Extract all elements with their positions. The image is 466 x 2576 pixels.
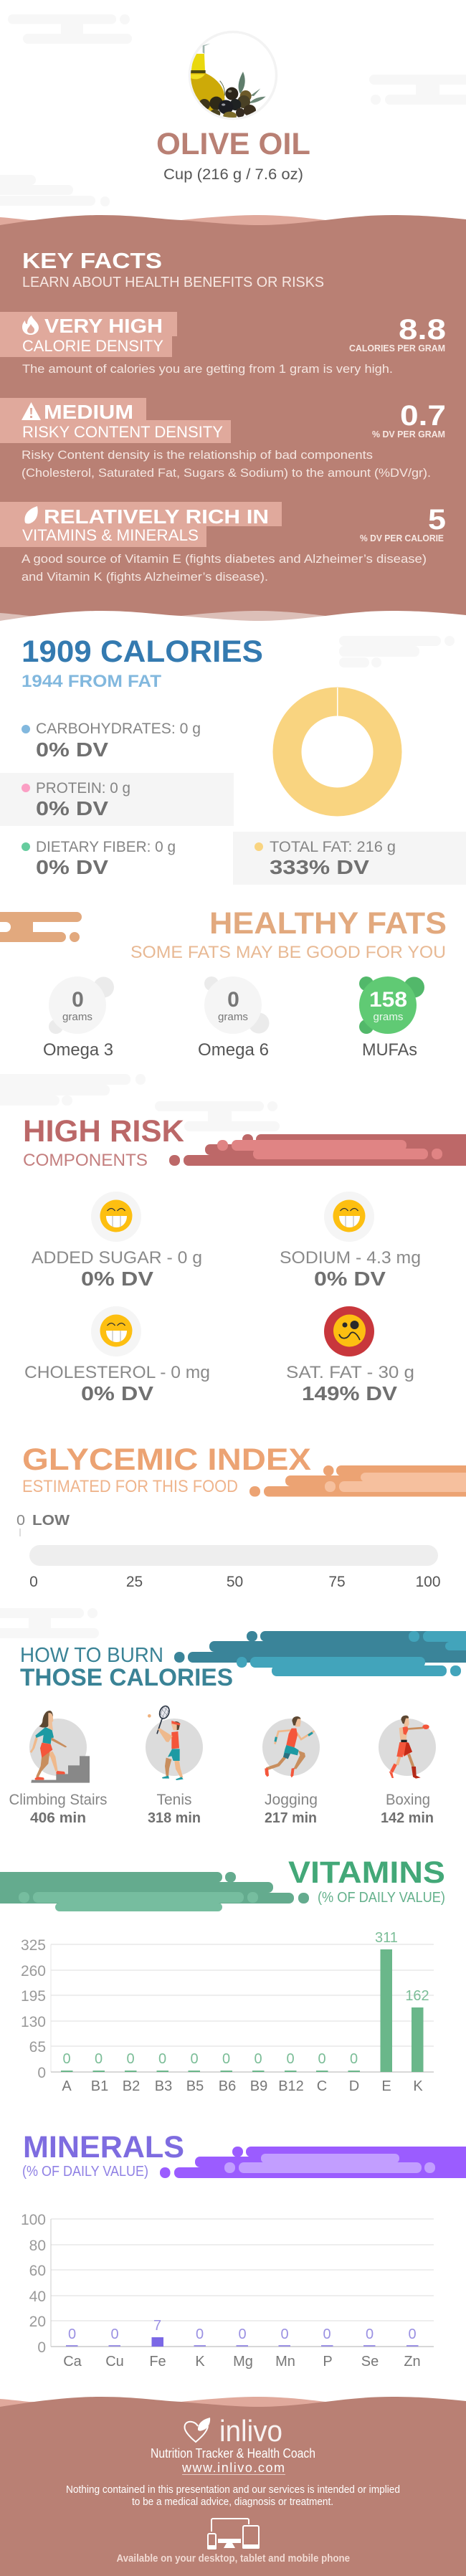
heading: minerals: MINERALS — [23, 2130, 184, 2164]
fact: calorie density: CALORIE DENSITY — [22, 337, 163, 355]
background cloud: mid centre — [155, 1101, 280, 1131]
bar chart: vitamins: C — [317, 2078, 327, 2094]
bar chart: vitamins: 130 — [21, 2014, 46, 2030]
gauge scale — [29, 1574, 441, 1590]
badge: omega 3 — [43, 976, 114, 1060]
bar chart: vitamins: B6 — [219, 2078, 236, 2094]
bar chart: minerals: Se — [361, 2354, 379, 2370]
background cloud: top right — [369, 75, 466, 105]
fact: vitamins and minerals: % DV PER CALORIE — [360, 533, 444, 543]
fact: calorie density: VERY HIGH — [44, 315, 163, 337]
icon: grinning face — [324, 1192, 374, 1242]
metric: dv per gram: 0.7 — [400, 400, 446, 432]
bar chart: vitamins: 0 — [254, 2051, 262, 2067]
bar chart: minerals: 80 — [29, 2238, 46, 2254]
background cloud: calories — [339, 636, 455, 667]
activity: boxing: Boxing — [386, 1792, 430, 1808]
activity: climbing stairs — [9, 1711, 108, 1826]
fact: vitamins and minerals: and Vitamin K (fights Alzheimer’s disease). — [22, 570, 268, 584]
legend: protein — [0, 773, 234, 826]
fact: calorie density: CALORIES PER GRAM — [349, 343, 445, 353]
badge: mufas — [359, 976, 424, 1060]
bar chart: minerals: 0 — [323, 2327, 331, 2342]
fact: vitamins and minerals — [0, 502, 446, 584]
legend: dietary fiber — [22, 839, 176, 878]
metric: dv per calorie: 5 — [428, 504, 446, 536]
item: sodium — [280, 1192, 421, 1290]
badge: mufas: 158 — [369, 988, 407, 1012]
activity: climbing stairs: Climbing Stairs — [9, 1792, 108, 1808]
bar chart: minerals: 0 — [68, 2327, 76, 2342]
disclaimer: Nothing contained in this presentation and our services is intended or implied — [66, 2484, 400, 2496]
legend: protein: 0% DV — [36, 797, 108, 819]
bar chart: vitamins: 0 — [286, 2051, 295, 2067]
illustration: jogger — [262, 1716, 320, 1777]
panel: vitamins — [0, 1855, 445, 2094]
badge: mufas: MUFAs — [362, 1040, 417, 1060]
decorative band: high risk — [169, 1134, 466, 1166]
decorative band: burn — [174, 1631, 466, 1676]
decorative band: healthy fats — [0, 912, 82, 942]
bar chart: minerals: Mg — [233, 2354, 253, 2370]
bar chart: vitamins: A — [62, 2078, 72, 2094]
gauge scale: 0 — [29, 1574, 38, 1590]
subheading: components: COMPONENTS — [23, 1151, 148, 1170]
gauge scale: 50 — [227, 1574, 243, 1590]
background cloud: left — [0, 175, 110, 206]
illustration: tennis player — [146, 1705, 203, 1780]
icon: heart with leaf — [184, 2418, 210, 2442]
panel: key facts — [0, 215, 466, 635]
legend: carbohydrates: CARBOHYDRATES: 0 g — [36, 721, 201, 737]
bar chart: vitamins: 0 — [62, 2051, 71, 2067]
gauge value — [16, 1513, 70, 1536]
fact: risky content density: MEDIUM — [44, 401, 133, 423]
website: www.inlivo.com — [181, 2461, 285, 2475]
activity: boxing — [379, 1716, 436, 1826]
bar chart: minerals: 100 — [21, 2212, 46, 2228]
logo: inlivo — [184, 2414, 282, 2448]
fact: vitamins and minerals: RELATIVELY RICH IN — [44, 505, 269, 528]
bar chart: minerals: 7 — [153, 2318, 161, 2334]
bar chart: vitamins: 0 — [318, 2051, 326, 2067]
bar chart: minerals: 0 — [280, 2327, 289, 2342]
badge: mufas: grams — [373, 1011, 403, 1023]
badge: omega 6: 0 — [227, 988, 239, 1012]
fact: calorie density: The amount of calories you are getting from 1 gram is very high. — [22, 362, 393, 376]
bar chart: minerals: Cu — [105, 2354, 124, 2370]
icon: warning triangle — [22, 402, 41, 420]
fact: risky content density: (Cholesterol, Saturated Fat, Sugars & Sodium) to the amount (%DV/gr). — [22, 466, 431, 480]
availability note: Available on your desktop, tablet and mobile phone — [116, 2552, 350, 2565]
panel: burn calories — [9, 1631, 466, 1826]
background cloud: top left — [8, 14, 132, 44]
logo: inlivo: inlivo — [219, 2414, 282, 2448]
bar chart: vitamins: 0 — [158, 2051, 166, 2067]
subheading: healthy fats: SOME FATS MAY BE GOOD FOR YOU — [130, 943, 446, 962]
bar chart: vitamins: B5 — [186, 2078, 204, 2094]
activity: boxing: 142 min — [381, 1810, 434, 1826]
fact: risky content density — [0, 398, 446, 480]
fact: calorie density — [0, 312, 446, 376]
donut chart: macronutrients — [287, 688, 387, 802]
item: saturated fat: SAT. FAT - 30 g — [286, 1363, 414, 1382]
panel: minerals — [21, 2130, 466, 2370]
activity: tennis — [146, 1705, 203, 1826]
bar chart: vitamins: K — [413, 2078, 423, 2094]
icon: desktop, tablet and phone — [207, 2519, 260, 2549]
bar chart: vitamins: B9 — [250, 2078, 267, 2094]
bar chart: vitamins: 195 — [21, 1988, 46, 2005]
disclaimer: to be a medical advice, diagnosis or treatment. — [132, 2496, 333, 2508]
fact: risky content density: % DV PER GRAM — [372, 429, 445, 439]
gauge value: 0 — [16, 1513, 25, 1529]
subheading: vitamins: (% OF DAILY VALUE) — [318, 1890, 445, 1906]
legend: carbohydrates: 0% DV — [36, 738, 108, 761]
icon: leaf — [24, 506, 38, 523]
bar chart: minerals: Fe — [149, 2354, 166, 2370]
legend: protein: PROTEIN: 0 g — [36, 780, 130, 797]
bar chart: minerals: 60 — [29, 2263, 46, 2279]
badge: omega 3: grams — [62, 1011, 92, 1023]
icon: flame — [22, 315, 39, 335]
bar chart: vitamins: 162 — [405, 1988, 429, 2004]
serving size: Cup (216 g / 7.6 oz) — [163, 166, 303, 183]
heading: those calories: THOSE CALORIES — [20, 1664, 233, 1691]
item: saturated fat: 149% DV — [302, 1382, 397, 1405]
gauge scale: 75 — [328, 1574, 346, 1590]
subheading: minerals: (% OF DAILY VALUE) — [22, 2164, 148, 2180]
bar chart: vitamins: B3 — [155, 2078, 172, 2094]
badge: omega 6: grams — [218, 1011, 248, 1023]
bar chart: minerals: 0 — [110, 2327, 119, 2342]
gauge scale: 25 — [126, 1574, 143, 1590]
panel: healthy fats — [0, 906, 447, 1060]
bar chart: vitamins — [21, 1930, 434, 2094]
metric: calories per gram: 8.8 — [399, 314, 446, 346]
food image: olive oil bottle and olives — [186, 32, 277, 120]
fact: risky content density: RISKY CONTENT DENSITY — [22, 423, 223, 441]
item: added sugar: ADDED SUGAR - 0 g — [32, 1248, 202, 1268]
illustration: woman climbing stairs — [29, 1711, 90, 1783]
heading: high risk: HIGH RISK — [23, 1114, 184, 1149]
item: added sugar: 0% DV — [81, 1268, 153, 1290]
legend: dietary fiber: DIETARY FIBER: 0 g — [36, 839, 176, 855]
heading: key facts: KEY FACTS — [22, 248, 162, 273]
bar chart: minerals: 0 — [408, 2327, 417, 2342]
bar chart: vitamins: 0 — [126, 2051, 135, 2067]
gauge value: LOW — [32, 1513, 70, 1529]
bar chart: minerals: Ca — [63, 2354, 82, 2370]
tagline: Nutrition Tracker & Health Coach — [151, 2446, 315, 2461]
legend: dietary fiber: 0% DV — [36, 856, 108, 878]
panel: high risk — [23, 1114, 466, 1405]
bar chart: vitamins: 260 — [21, 1963, 46, 1979]
bar chart: vitamins: 325 — [21, 1937, 46, 1954]
panel: footer — [0, 2397, 466, 2576]
badge: omega 6: Omega 6 — [198, 1040, 269, 1060]
bar chart: vitamins: D — [349, 2078, 359, 2094]
heading: glycemic index: GLYCEMIC INDEX — [22, 1443, 311, 1477]
activity: jogging — [262, 1716, 320, 1826]
bar chart: minerals: Mn — [275, 2354, 295, 2370]
badge: omega 6 — [198, 976, 270, 1060]
bar chart: vitamins: 0 — [190, 2051, 199, 2067]
background cloud: burn — [0, 1608, 99, 1638]
bar chart: minerals: K — [195, 2354, 205, 2370]
activity: climbing stairs: 406 min — [30, 1810, 86, 1826]
panel: glycemic index — [16, 1443, 466, 1590]
heading: calories: 1909 CALORIES — [22, 635, 263, 669]
fact: vitamins and minerals: A good source of Vitamin E (fights diabetes and Alzheimer’s disease) — [22, 552, 427, 566]
bar chart: minerals: 0 — [37, 2339, 46, 2356]
bar chart: vitamins: B12 — [278, 2078, 304, 2094]
item: cholesterol — [24, 1306, 210, 1405]
activity: jogging: Jogging — [265, 1792, 318, 1808]
legend: total fat — [233, 832, 466, 885]
title: OLIVE OIL — [156, 127, 310, 161]
decorative band: vitamins — [0, 1872, 309, 1911]
panel: calories — [0, 635, 466, 885]
heading: vitamins: VITAMINS — [288, 1855, 445, 1890]
gauge scale: 100 — [415, 1574, 441, 1590]
bar chart: vitamins: 0 — [37, 2065, 46, 2081]
bar chart: minerals: 0 — [238, 2327, 247, 2342]
activity: jogging: 217 min — [265, 1810, 317, 1826]
fact: vitamins and minerals: VITAMINS & MINERALS — [22, 526, 199, 544]
bar chart: vitamins: B1 — [91, 2078, 108, 2094]
subheading: glycemic: ESTIMATED FOR THIS FOOD — [22, 1477, 238, 1496]
legend: total fat: 333% DV — [270, 856, 369, 878]
fact: risky content density: Risky Content density is the relationship of bad components — [22, 448, 373, 462]
activity: tennis: Tenis — [156, 1792, 192, 1808]
legend: carbohydrates — [22, 721, 201, 761]
badge: omega 3: 0 — [72, 988, 84, 1012]
item: cholesterol: 0% DV — [81, 1382, 153, 1405]
decorative band: minerals — [160, 2147, 466, 2178]
item: added sugar — [32, 1192, 202, 1290]
badge: omega 3: Omega 3 — [43, 1040, 113, 1060]
heading: healthy fats: HEALTHY FATS — [209, 906, 447, 941]
illustration: boxer — [379, 1716, 436, 1779]
item: sodium: SODIUM - 4.3 mg — [280, 1248, 421, 1268]
disclaimer — [66, 2484, 400, 2508]
bar chart: minerals: 20 — [29, 2314, 46, 2330]
heading: how to burn: HOW TO BURN — [20, 1644, 163, 1667]
bar chart: vitamins: 0 — [222, 2051, 230, 2067]
icon: grinning face — [91, 1192, 141, 1242]
item: cholesterol: CHOLESTEROL - 0 mg — [24, 1363, 210, 1382]
bar chart: minerals — [21, 2212, 434, 2370]
activity: tennis: 318 min — [148, 1810, 201, 1826]
bar chart: vitamins: E — [381, 2078, 391, 2094]
item: sodium: 0% DV — [314, 1268, 386, 1290]
bar chart: vitamins: 65 — [29, 2039, 46, 2055]
item: saturated fat — [286, 1306, 414, 1405]
bar chart: vitamins: 0 — [350, 2051, 358, 2067]
bar chart: minerals: 0 — [196, 2327, 204, 2342]
gauge bar — [29, 1545, 438, 1566]
subheading: calories from fat: 1944 FROM FAT — [22, 672, 161, 691]
bar chart: vitamins: B2 — [123, 2078, 140, 2094]
legend: total fat: TOTAL FAT: 216 g — [270, 839, 396, 855]
decorative band: glycemic index — [249, 1465, 466, 1497]
bar chart: minerals: Zn — [404, 2354, 421, 2370]
subheading: LEARN ABOUT HEALTH BENEFITS OR RISKS — [22, 275, 324, 290]
bar chart: minerals: 0 — [366, 2327, 374, 2342]
background cloud: mid left — [0, 1074, 146, 1106]
bar chart: vitamins: 0 — [95, 2051, 103, 2067]
bar chart: minerals: 40 — [29, 2289, 46, 2305]
bar chart: minerals: P — [323, 2354, 333, 2370]
icon: grinning face — [91, 1306, 141, 1356]
bar chart: vitamins: 311 — [375, 1930, 398, 1946]
icon: unhappy face — [324, 1306, 374, 1356]
